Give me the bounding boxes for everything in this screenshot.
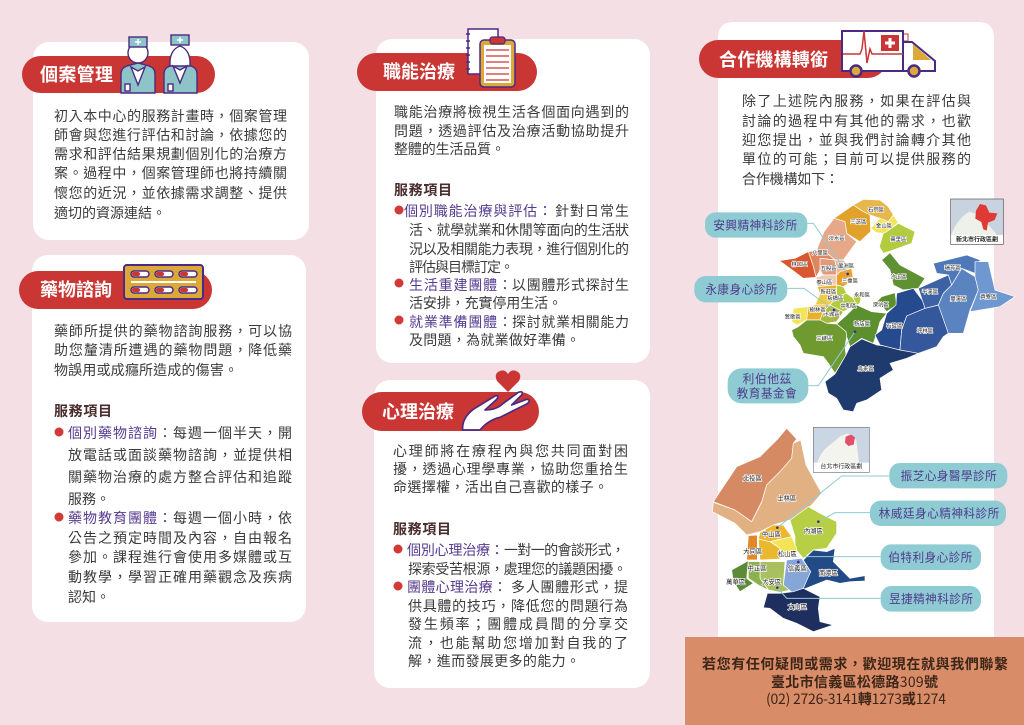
callout: 伯特利身心診所 (797, 544, 981, 570)
map: 台北市行政區: 北投區 (743, 474, 762, 483)
list: 藥物服務項目: 個別藥物諮詢： (68, 425, 172, 441)
text: 職能治療說明: 職能治療將檢視生活各個面向遇到的 (394, 104, 629, 120)
list: 藥物服務項目: 藥物教育團體： (68, 510, 172, 526)
callout: 利伯他茲教育基金會 (728, 330, 856, 403)
footer: 聯絡資訊: 臺北市信義區松德路309號 (771, 672, 938, 692)
text: 職能治療說明: 整體的生活品質。 (394, 141, 505, 157)
callout: 伯特利身心診所: 伯特利身心診所 (888, 550, 973, 564)
list: 藥物服務項目: 關藥物治療的處方整合評估和追蹤 (68, 469, 292, 485)
list: 藥物服務項目: 服務。 (68, 491, 110, 507)
icon: pill blister (124, 265, 203, 299)
list: 職能服務項目: 生活重建團體： (409, 277, 512, 293)
map: 台北市行政區: 中山區 (762, 529, 781, 538)
map: 新北市行政區: 蘆洲區 (838, 262, 855, 270)
text: 心理治療說明: 心理師將在療程內與您共同面對困 (393, 443, 628, 459)
text: 藥物諮詢說明 (54, 323, 292, 378)
footer: 聯絡資訊: (02) 2726-3141轉1273或1274 (766, 689, 946, 709)
icon: clipboard (466, 29, 515, 87)
list: 職能服務項目: 評估與目標訂定。 (409, 259, 514, 275)
icon: ambulance (842, 31, 935, 76)
text: 心理治療說明 (393, 443, 628, 495)
map: 新北市行政區: 金山區 (876, 221, 893, 229)
text: 轉介說明: 迎您提出，並與我們討論轉介其他 (742, 132, 971, 148)
map: 新北市行政區: 樹林區 (810, 306, 826, 314)
heading: 合作機構轉銜: 合作機構轉銜 (719, 49, 828, 70)
map: 新北市行政區: 中和區 (840, 301, 857, 309)
map: 新北市行政區: 永和區 (854, 290, 871, 298)
map: 新北市行政區: 貢寮區 (980, 293, 997, 301)
map: 新北市行政區: 三重區 (842, 277, 859, 285)
list: 職能服務項目: 活安排，充實停用生活。 (409, 295, 562, 311)
map: 新北市行政區: 五股區 (821, 265, 837, 272)
inset: 台北市行政區圖: 台北市行政區劃 (820, 463, 862, 471)
map: 新北市行政區: 萬里區 (890, 235, 907, 243)
callout: 林威廷身心精神科診所: 林威廷身心精神科診所 (879, 507, 1000, 521)
list: 心理服務項目: 發生頻率；團體成員間的分享交 (408, 616, 628, 632)
text: 個案管理說明: 懷您的近況，並依據需求調整、提供 (54, 185, 287, 201)
text: 藥物諮詢說明: 藥師所提供的藥物諮詢服務，可以協 (54, 323, 292, 339)
text: 藥物諮詢說明: 助您釐清所遭遇的藥物問題，降低藥 (54, 342, 292, 358)
heading: 個案管理 (22, 56, 215, 93)
map: 台北市行政區: 大安區 (762, 577, 782, 586)
map: 新北市行政區: 板橋區 (827, 294, 844, 302)
list: 藥物服務項目: 認知。 (68, 589, 110, 605)
icon: hand holding heart (463, 370, 529, 430)
callout: 利伯他茲教育基金會: 利伯他茲 (743, 372, 792, 386)
heading: 服務項目: 服務項目 (54, 403, 112, 419)
map: 新北市行政區: 烏來區 (858, 364, 874, 372)
callout: 林威廷身心精神科診所 (817, 501, 1006, 526)
callout: 安興精神科診所: 安興精神科診所 (713, 218, 798, 232)
panel: 合作機構轉銜 (699, 22, 994, 637)
map: 新北市行政區: 深坑區 (873, 301, 889, 309)
map: 台北市行政區: 文山區 (788, 602, 807, 611)
text: 個案管理說明: 適切的資源連結。 (54, 205, 166, 221)
text: 職能治療說明 (394, 104, 629, 157)
callout: 永康身心診所 (694, 276, 835, 311)
list: 職能服務項目: 個別職能治療與評估： (404, 203, 552, 219)
map: 台北市行政區: 萬華區 (726, 577, 746, 586)
text: 轉介說明: 合作機構如下： (742, 171, 839, 187)
map: 台北市行政區: 內湖區 (804, 526, 823, 535)
panel: 藥物諮詢 (19, 255, 306, 622)
list: 藥物服務項目 (54, 425, 292, 605)
heading: 個案管理: 個案管理 (40, 64, 113, 85)
inset: 台北市行政區圖 (813, 427, 869, 472)
callout: 昱捷精神科診所 (776, 586, 981, 612)
inset: 新北市行政區圖 (951, 199, 1003, 244)
heading: 服務項目: 服務項目 (393, 521, 451, 537)
list: 職能服務項目: 及問題，為就業做好準備。 (409, 332, 580, 348)
heading: 藥物諮詢: 藥物諮詢 (40, 279, 112, 300)
text: 個案管理說明: 師會與您進行評估和討論，依據您的 (54, 127, 287, 143)
map: 台北市行政區 (712, 427, 1007, 632)
map: 新北市行政區: 瑞芳區 (945, 263, 961, 271)
map: 新北市行政區: 坪林區 (917, 327, 934, 335)
map: 台北市行政區: 信義區 (788, 564, 807, 573)
heading: 心理治療 (362, 392, 539, 431)
footer: 聯絡資訊 (685, 637, 1024, 725)
callout: 利伯他茲教育基金會: 教育基金會 (737, 387, 797, 401)
text: 職能治療說明: 問題，透過評估及治療活動協助提升 (394, 123, 629, 139)
text: 轉介說明: 單位的可能；目前可以提供服務的 (742, 151, 971, 167)
list: 藥物服務項目: 參加。課程進行會使用多媒體或互 (68, 549, 292, 565)
list: 職能服務項目 (394, 203, 629, 348)
callout: 永康身心診所: 永康身心診所 (705, 282, 778, 296)
map: 新北市行政區: 石門區 (868, 207, 885, 214)
list: 心理服務項目: 多人團體形式，提 (511, 579, 628, 595)
map: 台北市行政區: 南港區 (819, 568, 838, 577)
callout: 安興精神科診所 (705, 212, 849, 275)
list: 心理服務項目: 一對一的會談形式， (504, 542, 625, 558)
text: 藥物諮詢說明: 物誤用或成癮所造成的傷害。 (54, 362, 238, 378)
callout: 振芝心身醫學診所: 振芝心身醫學診所 (901, 469, 997, 483)
panel: 個案管理 (22, 35, 309, 240)
heading: 合作機構轉銜 (699, 40, 887, 78)
list: 職能服務項目: 探討就業相關能力 (512, 314, 629, 330)
heading: 職能治療: 職能治療 (383, 62, 455, 82)
text: 個案管理說明: 案。過程中，個案管理師也將持續關 (54, 165, 287, 181)
map: 新北市行政區: 石碇區 (886, 322, 903, 330)
list: 心理服務項目: 個別心理治療： (407, 542, 504, 558)
heading: 職能治療 (357, 53, 537, 91)
map: 新北市行政區: 淡水區 (829, 234, 845, 242)
map: 台北市行政區: 士林區 (777, 494, 797, 503)
list: 藥物服務項目: 公告之預定時間及內容，自由報名 (68, 530, 292, 546)
map: 新北市行政區: 鶯歌區 (785, 312, 801, 320)
map: 新北市行政區: 雙溪區 (950, 294, 967, 302)
text: 轉介說明: 除了上述院內服務，如果在評估與 (742, 93, 971, 109)
panel: 心理治療 (362, 370, 650, 688)
map: 新北市行政區: 新莊區 (820, 287, 837, 295)
list: 藥物服務項目: 放電話或面談藥物諮詢，並提供相 (68, 447, 292, 463)
map: 新北市行政區: 平溪區 (922, 287, 939, 295)
text: 個案管理說明: 需求和評估結果規劃個別化的治療方 (54, 146, 287, 162)
list: 職能服務項目: 以團體形式探討生 (512, 277, 629, 293)
map: 新北市行政區: 汐止區 (890, 272, 907, 280)
footer: 聯絡資訊: 若您有任何疑問或需求，歡迎現在就與我們聯繫 (702, 654, 1008, 674)
list: 心理服務項目: 探索受苦根源，處理您的議題困擾。 (408, 561, 627, 577)
icon: two nurses (121, 35, 197, 93)
text: 轉介說明 (742, 93, 971, 187)
list: 心理服務項目 (394, 542, 628, 669)
list: 心理服務項目: 團體心理治療： (407, 579, 507, 595)
list: 職能服務項目: 針對日常生 (555, 203, 629, 219)
map: 台北市行政區: 松山區 (778, 549, 797, 558)
inset: 新北市行政區圖: 新北市行政區劃 (956, 236, 998, 244)
map: 新北市行政區: 新店區 (854, 320, 871, 328)
map: 新北市行政區: 三峽區 (816, 334, 833, 342)
list: 藥物服務項目: 每週一個小時，依 (173, 510, 292, 526)
list: 藥物服務項目: 動教學，學習正確用藥觀念及疾病 (68, 569, 292, 585)
map: 新北市行政區: 八里區 (812, 250, 829, 257)
map: 新北市行政區 (694, 199, 1015, 412)
text: 個案管理說明: 初入本中心的服務計畫時，個案管理 (54, 108, 287, 124)
heading: 藥物諮詢 (19, 271, 212, 309)
map: 台北市行政區: 大同區 (743, 546, 763, 555)
map: 台北市行政區: 中正區 (748, 564, 767, 573)
list: 心理服務項目: 流，也能幫助您增加對自我的了 (408, 635, 628, 651)
map: 新北市行政區: 土城區 (824, 310, 840, 318)
list: 藥物服務項目: 每週一個半天，開 (173, 425, 292, 441)
map: 新北市行政區: 泰山區 (816, 278, 833, 286)
panel: 職能治療 (357, 29, 650, 363)
heading: 心理治療: 心理治療 (382, 402, 454, 422)
heading: 服務項目: 服務項目 (394, 182, 452, 198)
text: 轉介說明: 討論的過程中有其他的需求，也歡 (742, 113, 971, 129)
map: 新北市行政區: 三芝區 (850, 218, 867, 225)
list: 心理服務項目: 供具體的技巧，降低您的問題行為 (408, 598, 628, 614)
list: 職能服務項目: 況以及相關能力表現，進行個別化的 (409, 241, 629, 257)
text: 心理治療說明: 擾，透過心理學專業，協助您重拾生 (393, 461, 628, 477)
map: 新北市行政區: 林口區 (791, 260, 808, 268)
callout: 振芝心身醫學診所 (776, 463, 1007, 529)
text: 個案管理說明 (54, 108, 287, 221)
list: 心理服務項目: 解，進而發展更多的能力。 (408, 653, 580, 669)
callout: 昱捷精神科診所: 昱捷精神科診所 (889, 592, 973, 606)
list: 職能服務項目: 就業準備團體： (409, 314, 512, 330)
list: 職能服務項目: 活、就學就業和休閒等面向的生活狀 (409, 222, 629, 238)
text: 心理治療說明: 命選擇權，活出自己喜歡的樣子。 (393, 479, 608, 495)
